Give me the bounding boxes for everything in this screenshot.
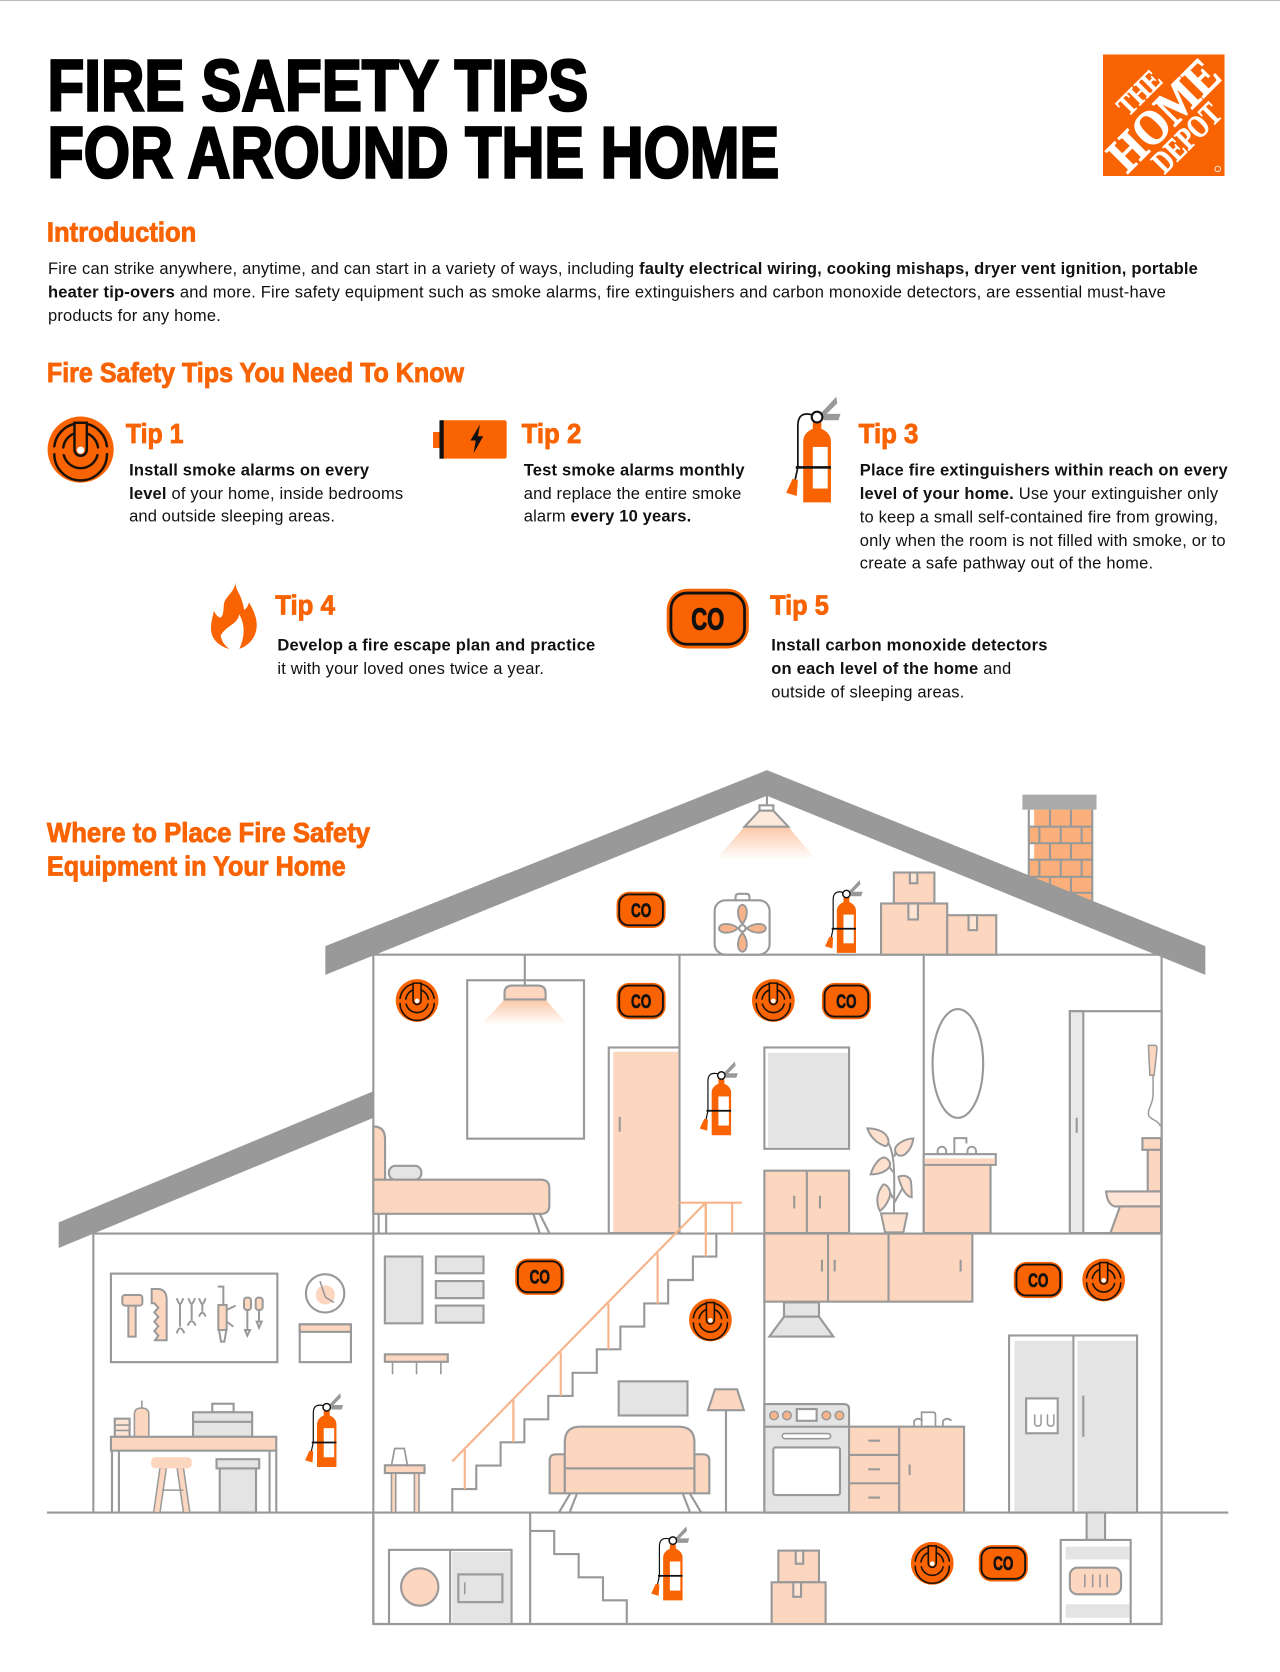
- bedroom window: [467, 980, 584, 1139]
- pegboard with tools: [111, 1274, 277, 1362]
- basement stairs: [530, 1531, 627, 1624]
- fire extinguisher: basement: [651, 1526, 689, 1600]
- tip 4 text: it with your loved ones twice a year.: [277, 659, 544, 678]
- tip 5: [667, 589, 1047, 702]
- intro paragraph: [48, 259, 1198, 325]
- intro paragraph: products for any home.: [48, 306, 221, 325]
- clock: [306, 1274, 344, 1313]
- hallway: [679, 1047, 913, 1233]
- saw: [152, 1289, 167, 1340]
- basement boxes: [772, 1551, 826, 1624]
- garage: [111, 1274, 351, 1513]
- tip 2 heading: Tip 2: [522, 418, 581, 449]
- logo: The Home Depot: THE: [1111, 64, 1169, 122]
- heading: Fire Safety Tips You Need To Know: Fire Safety Tips You Need To Know: [47, 357, 464, 388]
- bedroom lamp: [481, 955, 568, 1025]
- kitchen: [764, 1234, 1137, 1513]
- heading: Where to Place Fire Safety Equipment: Equipment in Your Home: [47, 851, 346, 882]
- top page border: [0, 0, 1280, 1]
- tip 5 text: Install carbon monoxide detectors: [771, 636, 1047, 655]
- tip 4 text: Develop a fire escape plan and practice: [277, 636, 595, 655]
- wall pictures: [385, 1257, 484, 1323]
- CO detector: bedroom: CO: [631, 992, 651, 1013]
- tip 3 text: level of your home. Use your extinguisher only: [860, 484, 1219, 503]
- smoke alarm: bedroom: [396, 979, 438, 1022]
- title: FIRE SAFETY TIPS: [47, 45, 588, 126]
- CO detector: basement: CO: [993, 1554, 1013, 1575]
- workbench: [111, 1401, 276, 1513]
- title: [47, 45, 779, 194]
- bedroom: [373, 955, 679, 1233]
- smoke alarm: basement: [911, 1542, 954, 1585]
- tip 3: [786, 397, 1229, 573]
- stool: [151, 1457, 192, 1513]
- icon: flame: [211, 582, 257, 649]
- tip 4 heading: Tip 4: [275, 589, 335, 620]
- house structure: [47, 955, 1228, 1624]
- tip 1 text: level of your home, inside bedrooms: [129, 484, 403, 503]
- toilet: [1106, 1138, 1161, 1233]
- intro paragraph: Fire can strike anywhere, anytime, and can start in a variety of ways, including faulty electrical wiring, cooking mishaps, dryer vent ignition, portable: [48, 259, 1198, 278]
- sofa: [550, 1427, 709, 1513]
- kitchen drawers: [849, 1427, 899, 1513]
- CO detector: attic: CO: [631, 901, 651, 922]
- smoke alarm: hall: [752, 979, 795, 1022]
- tip 2 text: alarm every 10 years.: [524, 507, 691, 526]
- tip 3 text: only when the room is not filled with smoke, or to: [860, 531, 1226, 550]
- attic lamp: [716, 795, 816, 860]
- icon: CO detector: CO: [691, 601, 724, 636]
- CO detector: basement: [979, 1545, 1028, 1581]
- icon: CO detector: [667, 589, 749, 649]
- hammer: [122, 1295, 142, 1337]
- tip 4 text: [277, 636, 595, 678]
- tip 5 text: on each level of the home and: [771, 659, 1011, 678]
- living room: [385, 1203, 744, 1513]
- CO detector: kitchen: [1014, 1262, 1063, 1298]
- icon: fire extinguisher: [786, 397, 841, 502]
- logo: The Home Depot: HOME: [1096, 47, 1231, 182]
- floor lamp: [708, 1389, 744, 1513]
- tip 3 text: create a safe pathway out of the home.: [860, 554, 1153, 573]
- upper stair rail: [679, 1203, 742, 1233]
- icon: smoke alarm: [48, 417, 114, 483]
- fire extinguisher: garage: [305, 1393, 343, 1467]
- intro paragraph: heater tip-overs and more. Fire safety equipment such as smoke alarms, fire extinguishers and carbon monoxide detectors, are essential must-have: [48, 283, 1166, 302]
- tip 1: [48, 417, 403, 526]
- logo: The Home Depot: [1103, 54, 1224, 176]
- tip 2 text: Test smoke alarms monthly: [524, 461, 745, 480]
- living room picture: [619, 1381, 687, 1415]
- bed: [373, 1126, 549, 1233]
- attic: [715, 795, 996, 955]
- staircase: [452, 1234, 716, 1513]
- main roof: [325, 770, 1205, 975]
- screwdrivers: [244, 1298, 263, 1336]
- range hood: [769, 1302, 833, 1337]
- CO detector: attic: [617, 892, 666, 928]
- refrigerator: [1009, 1335, 1137, 1513]
- bathroom door: [1070, 1011, 1162, 1233]
- tip 3 text: to keep a small self-contained fire from growing,: [860, 508, 1218, 527]
- icon: battery: [433, 420, 507, 459]
- hall cabinet: [764, 1171, 849, 1233]
- tip 3 heading: Tip 3: [859, 418, 918, 449]
- side table: [385, 1449, 425, 1513]
- tip 1 text: and outside sleeping areas.: [129, 507, 335, 526]
- tip 5 heading: Tip 5: [770, 589, 829, 620]
- vanity: [924, 1138, 996, 1233]
- tip 2 text: [524, 461, 745, 526]
- heading: Where to Place Fire Safety Equipment: Where to Place Fire Safety: [47, 817, 371, 848]
- shower: [1148, 1045, 1161, 1126]
- lean-to roof: [59, 1091, 373, 1248]
- house illustration: [47, 770, 1228, 1624]
- basement: [389, 1513, 1131, 1624]
- sink cabinet: [899, 1412, 964, 1513]
- CO detector: hall: [822, 983, 871, 1019]
- smoke alarm: stairs: [689, 1299, 732, 1341]
- plant: [867, 1128, 913, 1232]
- logo: The Home Depot: DEPOT: [1144, 95, 1228, 180]
- tip 5 text: outside of sleeping areas.: [771, 683, 964, 702]
- tip 5 text: [771, 636, 1047, 702]
- bedroom door: [609, 1047, 679, 1233]
- chimney: [1022, 795, 1097, 901]
- CO detector: bedroom: [617, 983, 666, 1019]
- tip 2 text: and replace the entire smoke: [524, 484, 741, 503]
- tip 3 text: [860, 461, 1229, 573]
- garage shelf: [300, 1324, 351, 1362]
- drill: [218, 1287, 236, 1342]
- tip 1 heading: Tip 1: [126, 418, 183, 449]
- heading: Introduction: Introduction: [47, 217, 196, 248]
- tip 1 text: [129, 461, 403, 526]
- furnace: [1061, 1513, 1131, 1624]
- bin: [217, 1459, 259, 1513]
- wrenches: [177, 1298, 206, 1333]
- stove: [764, 1404, 849, 1513]
- tip 4: [211, 582, 595, 678]
- fire extinguisher: second floor hall: [700, 1061, 738, 1135]
- tip 2: [433, 418, 745, 526]
- washer and dryer: [389, 1550, 512, 1624]
- upper cabinets: [764, 1234, 972, 1302]
- smoke alarm: kitchen: [1082, 1259, 1125, 1301]
- CO detector: kitchen: CO: [1028, 1271, 1048, 1292]
- fan: [715, 894, 770, 955]
- fire extinguisher: attic: [825, 880, 863, 953]
- attic boxes: [881, 873, 996, 955]
- title: FOR AROUND THE HOME: [47, 113, 779, 194]
- tip 3 text: Place fire extinguishers within reach on every: [860, 461, 1229, 480]
- tip 1 text: Install smoke alarms on every: [129, 461, 370, 480]
- heading: Where to Place Fire Safety Equipment: [47, 817, 371, 882]
- CO detector: living room: CO: [530, 1268, 550, 1289]
- bathroom: [924, 1009, 1162, 1233]
- bathroom mirror: [933, 1009, 983, 1118]
- CO detector: living room: [515, 1259, 564, 1295]
- hall window: [764, 1047, 849, 1149]
- stair rail: [452, 1203, 706, 1489]
- wall shelf: [385, 1354, 448, 1374]
- CO detector: hall: CO: [836, 992, 857, 1013]
